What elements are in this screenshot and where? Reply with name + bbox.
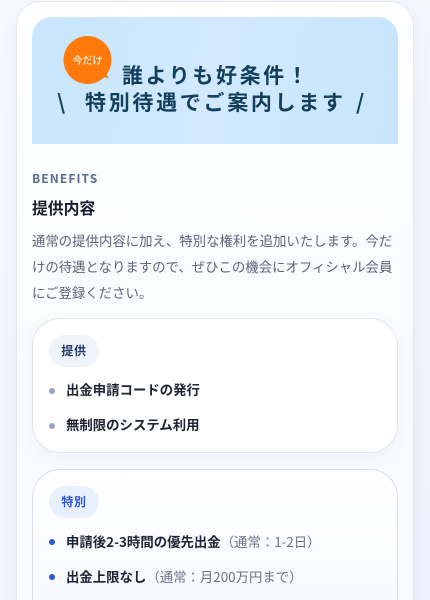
bullet <box>49 574 55 580</box>
tag: 提供: 提供 <box>61 342 87 359</box>
banner title line 1: 誰よりも好条件！ <box>122 60 310 90</box>
eyebrow: BENEFITS: BENEFITS <box>32 170 98 187</box>
item: 無制限のシステム利用 <box>66 414 200 434</box>
intro text: にご登録ください。 <box>32 282 152 302</box>
intro text <box>32 230 392 302</box>
badge: 今だけ <box>64 36 112 84</box>
banner title line 2: \ <box>57 87 68 117</box>
bullet <box>49 423 55 429</box>
bullet <box>49 388 55 394</box>
item: 出金上限なし（通常：月200万円まで） <box>66 566 303 586</box>
badge: 今だけ: 今だけ <box>72 52 102 67</box>
tag: 提供 <box>49 335 99 367</box>
heading: 提供内容 <box>32 196 95 219</box>
banner title line 2: / <box>356 87 367 117</box>
intro text: 通常の提供内容に加え、特別な権利を追加いたします。今だ <box>32 230 392 250</box>
panel: 特別 <box>32 469 398 600</box>
intro text: けの待遇となりますので、ぜひこの機会にオフィシャル会員 <box>32 256 392 276</box>
banner <box>32 17 398 144</box>
panel: 提供 <box>32 318 398 453</box>
item: 申請後2-3時間の優先出金（通常：1-2日） <box>66 531 321 551</box>
bullet <box>49 539 55 545</box>
item: 出金申請コードの発行 <box>66 379 200 399</box>
banner title line 2: 特別待遇でご案内します <box>85 87 346 117</box>
tag: 特別: 特別 <box>61 493 87 510</box>
tag: 特別 <box>49 486 99 518</box>
